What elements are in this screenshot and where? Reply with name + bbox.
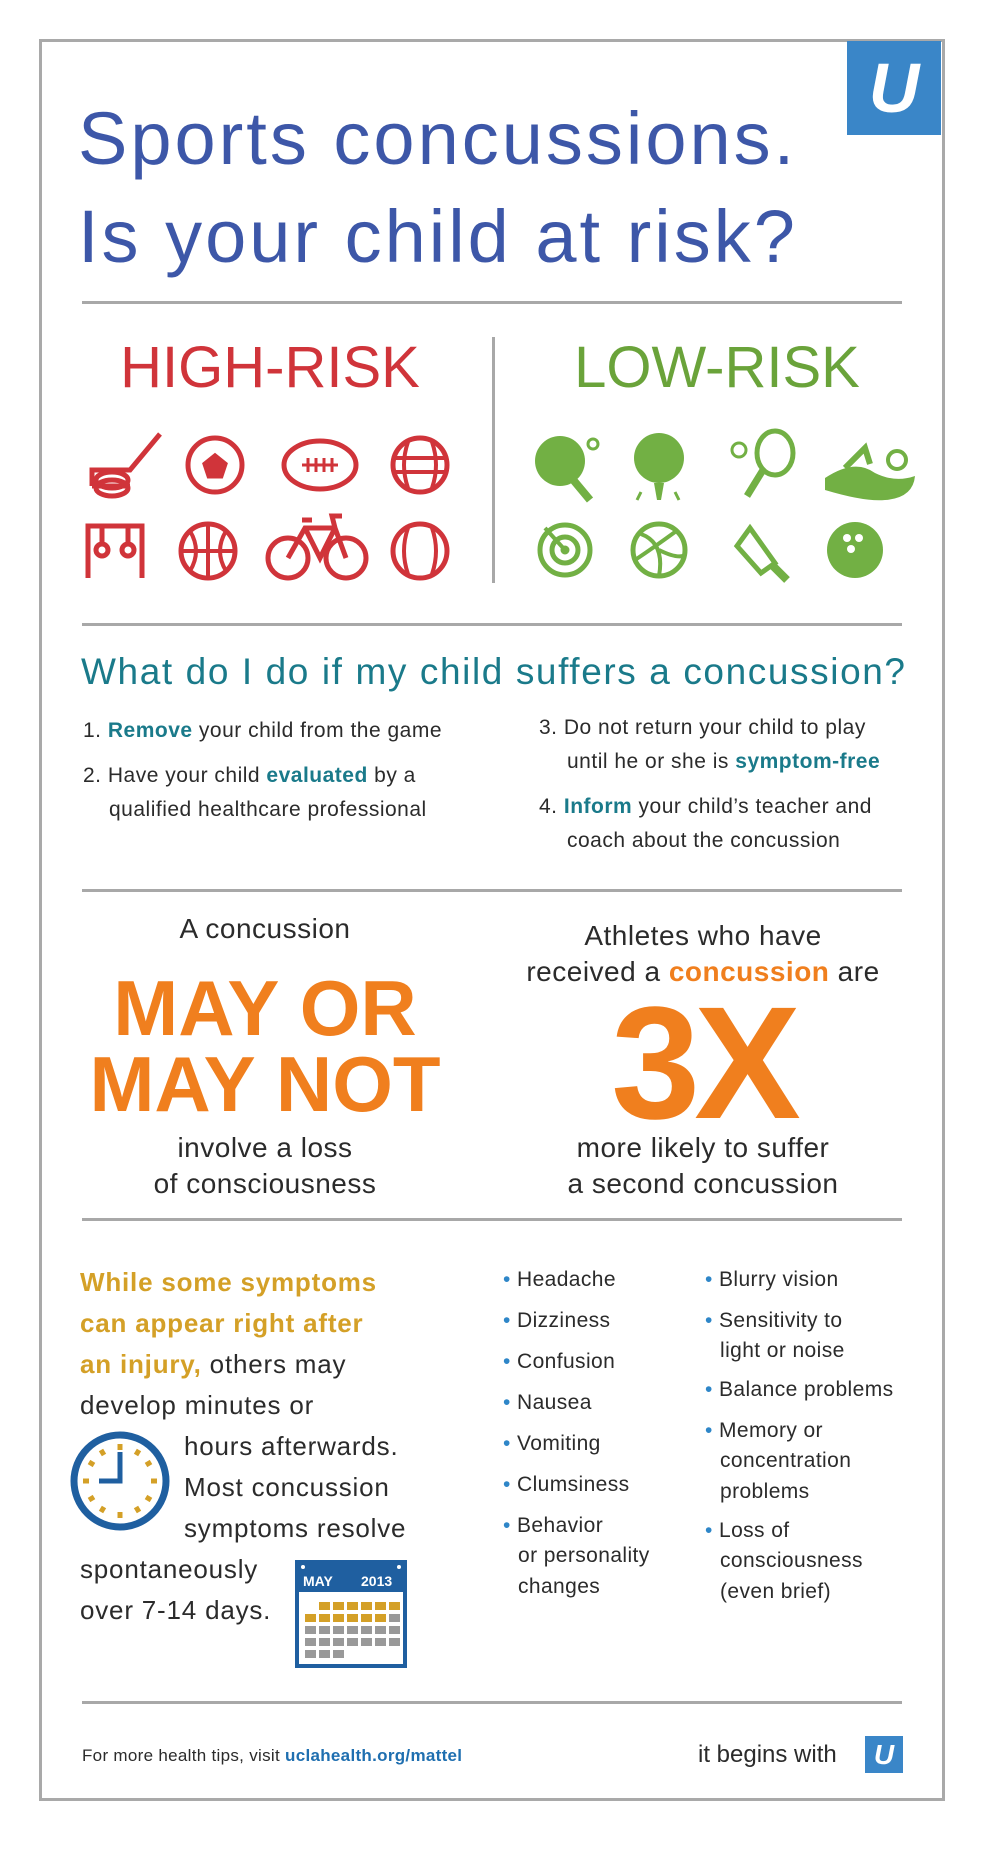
- symptoms list col 1: • Dizziness: [503, 1309, 610, 1332]
- title: [78, 97, 798, 278]
- stat: 3X: Athletes who have: [584, 920, 822, 951]
- title: Sports concussions.: [78, 97, 797, 180]
- steps list left: qualified healthcare professional: [109, 798, 427, 821]
- icon: calendar: MAY: [303, 1573, 333, 1589]
- footer tagline: it begins with: [698, 1741, 837, 1768]
- symptoms list col 2: [705, 1268, 894, 1603]
- symptoms timing text: spontaneously: [80, 1554, 258, 1584]
- logo U: [847, 41, 941, 135]
- heading: high-risk: HIGH-RISK: [120, 335, 420, 400]
- symptoms list col 2: • Blurry vision: [705, 1268, 839, 1291]
- stat: may or may not: of consciousness: [154, 1168, 376, 1199]
- title: Is your child at risk?: [78, 195, 798, 278]
- symptoms timing text: symptoms resolve: [184, 1513, 406, 1543]
- steps list right: 3. Do not return your child to play: [539, 716, 866, 739]
- symptoms timing text: can appear right after: [80, 1308, 363, 1338]
- steps list right: until he or she is symptom-free: [567, 750, 880, 773]
- symptoms timing text: hours afterwards.: [184, 1431, 398, 1461]
- symptoms list col 1: • Clumsiness: [503, 1473, 630, 1496]
- symptoms timing text: over 7-14 days.: [80, 1595, 271, 1625]
- icon: calendar: [295, 1560, 407, 1668]
- steps list right: 4. Inform your child’s teacher and: [539, 795, 872, 818]
- footer logo: [865, 1736, 903, 1773]
- stat: 3X: a second concussion: [567, 1168, 838, 1199]
- symptoms list col 1: [503, 1268, 650, 1598]
- symptoms list col 2: • Loss of: [705, 1519, 790, 1542]
- steps list right: [539, 716, 880, 852]
- icons: low-risk sports: [535, 428, 915, 583]
- symptoms list col 1: • Headache: [503, 1268, 616, 1291]
- symptoms list col 2: (even brief): [720, 1580, 831, 1603]
- symptoms list col 2: • Sensitivity to: [705, 1309, 842, 1332]
- footer logo: U: [874, 1739, 894, 1770]
- heading: low-risk: LOW-RISK: [574, 335, 860, 400]
- symptoms timing text: [80, 1267, 406, 1625]
- symptoms timing text: develop minutes or: [80, 1390, 314, 1420]
- question heading: What do I do if my child suffers a concussion?: [81, 651, 907, 692]
- steps list left: 2. Have your child evaluated by a: [83, 764, 416, 787]
- footer text: For more health tips, visit uclahealth.org/mattel: [82, 1746, 462, 1765]
- symptoms list col 1: • Nausea: [503, 1391, 592, 1414]
- stat: may or may not: MAY NOT: [89, 1040, 441, 1128]
- symptoms list col 1: or personality: [518, 1544, 650, 1567]
- symptoms list col 1: • Behavior: [503, 1514, 603, 1537]
- logo U: U: [869, 49, 919, 127]
- icon: calendar: 2013: [361, 1573, 392, 1589]
- symptoms timing text: While some symptoms: [80, 1267, 377, 1297]
- symptoms list col 2: light or noise: [720, 1339, 845, 1362]
- stat: may or may not: A concussion: [180, 913, 350, 944]
- symptoms timing text: an injury, others may: [80, 1349, 346, 1379]
- symptoms timing text: Most concussion: [184, 1472, 390, 1502]
- stat: may or may not: [89, 913, 441, 1199]
- stat: may or may not: MAY OR: [113, 964, 417, 1052]
- stat: 3X: more likely to suffer: [577, 1132, 829, 1163]
- symptoms list col 2: • Memory or: [705, 1419, 823, 1442]
- steps list right: coach about the concussion: [567, 829, 840, 852]
- symptoms list col 1: • Confusion: [503, 1350, 615, 1373]
- symptoms list col 2: consciousness: [720, 1549, 863, 1572]
- symptoms list col 2: problems: [720, 1480, 810, 1503]
- stat: 3X: received a concussion are: [526, 956, 880, 987]
- symptoms list col 1: changes: [518, 1575, 600, 1598]
- steps list left: [83, 719, 442, 821]
- stat: 3X: 3X: [611, 973, 795, 1152]
- symptoms list col 2: • Balance problems: [705, 1378, 894, 1401]
- icon: clock: [70, 1432, 170, 1530]
- symptoms list col 1: • Vomiting: [503, 1432, 601, 1455]
- stat: 3X: [526, 920, 880, 1199]
- icons: high-risk sports: [86, 432, 450, 580]
- steps list left: 1. Remove your child from the game: [83, 719, 442, 742]
- stat: may or may not: involve a loss: [177, 1132, 353, 1163]
- symptoms list col 2: concentration: [720, 1449, 851, 1472]
